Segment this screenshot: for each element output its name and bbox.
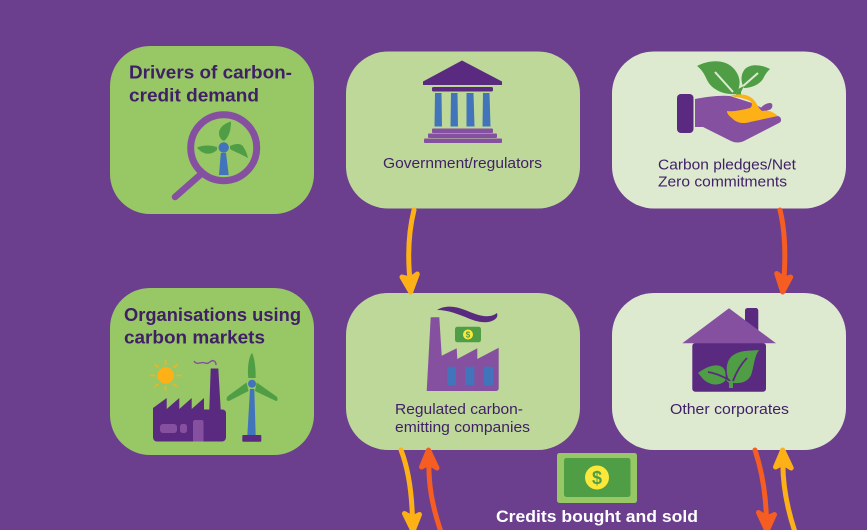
icon: magnifier with leaf turbine bbox=[175, 115, 257, 197]
icon: factory with smoke bbox=[153, 361, 226, 442]
arrow: other corporates sell bbox=[776, 450, 795, 530]
label: other corporates: Other corporates bbox=[670, 402, 789, 418]
label: carbon pledges: Carbon pledges/Net bbox=[658, 158, 796, 174]
icon: factory with money: $ bbox=[466, 330, 471, 340]
arrow: regulated companies sell bbox=[401, 450, 420, 530]
panel: government/regulators bbox=[346, 52, 580, 208]
arrow: regulated companies buy bbox=[422, 450, 441, 530]
icon: banknote bbox=[557, 453, 637, 503]
label: carbon pledges: Zero commitments bbox=[658, 174, 787, 190]
panel: other corporates bbox=[612, 293, 846, 450]
icon: wind turbine bbox=[227, 353, 278, 442]
heading: drivers: Drivers of carbon- bbox=[129, 62, 292, 82]
icon: government building bbox=[423, 60, 502, 143]
heading: organisations: Organisations using bbox=[124, 304, 301, 325]
arrow: government to regulated companies bbox=[402, 210, 417, 292]
label: government/regulators: Government/regulators bbox=[383, 156, 542, 172]
icon: house with leaves bbox=[682, 308, 776, 392]
panel: drivers of carbon-credit demand bbox=[110, 46, 314, 214]
arrow: other corporates buy bbox=[755, 450, 774, 530]
icon: sun bbox=[150, 360, 182, 391]
label: regulated companies: Regulated carbon- bbox=[395, 402, 523, 418]
icon: banknote: $ bbox=[592, 468, 602, 488]
icon: factory with money bbox=[427, 307, 499, 391]
label: regulated companies: emitting companies bbox=[395, 420, 530, 436]
panel: carbon pledges bbox=[612, 52, 846, 208]
panel: regulated carbon-emitting companies bbox=[346, 293, 580, 450]
heading: organisations: carbon markets bbox=[124, 326, 265, 348]
label: credits bought and sold: Credits bought and sold bbox=[496, 508, 698, 526]
panel: organisations using carbon markets bbox=[110, 288, 314, 455]
arrow: pledges to other corporates bbox=[777, 210, 791, 292]
heading: drivers: credit demand bbox=[129, 84, 259, 106]
icon: hand holding seedling bbox=[677, 61, 781, 143]
